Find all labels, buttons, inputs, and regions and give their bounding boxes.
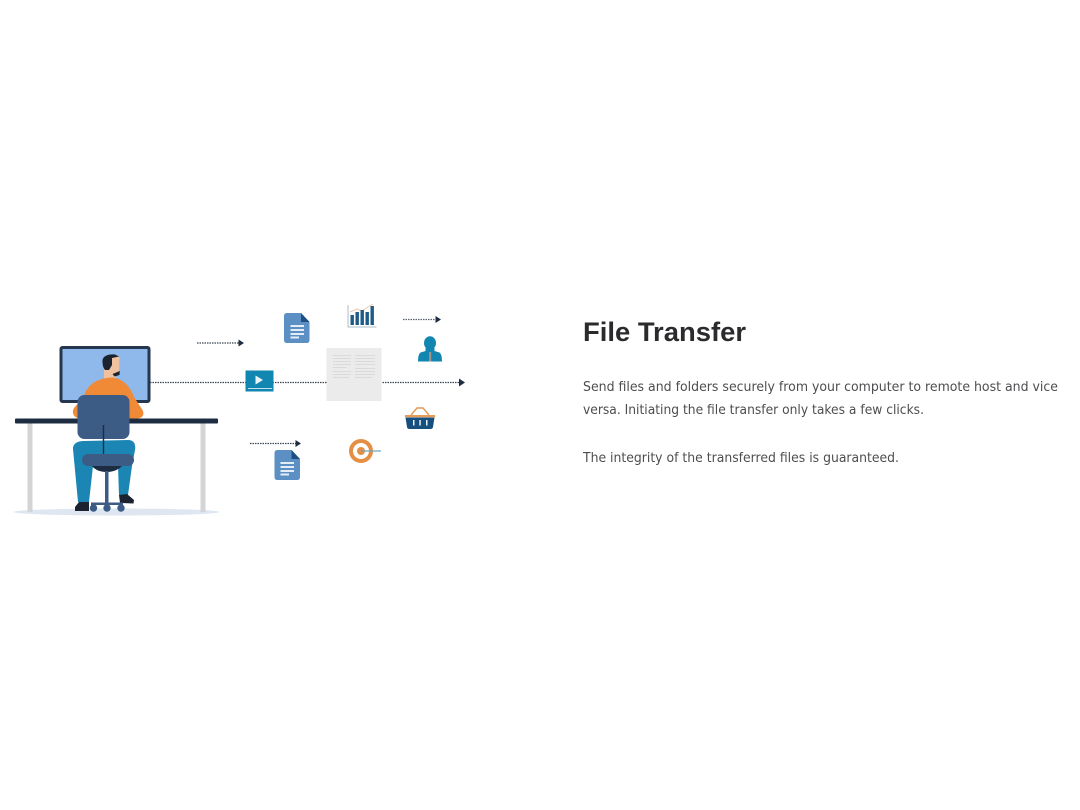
chair [78, 395, 134, 512]
text block: description: versa. Initiating the file transfer only takes a few clicks. [583, 402, 924, 418]
person: orange shirt [73, 378, 143, 418]
text block: description: Send files and folders securely from your computer to remote host and vice [583, 379, 1058, 395]
icon: bar chart [348, 304, 376, 327]
person: shoes [75, 494, 134, 511]
icon: document bottom [274, 450, 300, 480]
text block: description [583, 379, 1058, 418]
icon: document top [284, 313, 310, 343]
icon: shopping basket [405, 408, 435, 429]
illustration: file transfer scene [14, 304, 465, 516]
icon: target [351, 441, 381, 461]
icon: computer monitor [61, 348, 149, 402]
arrow: main dotted line from monitor [150, 378, 465, 386]
title: File Transfer [583, 317, 746, 347]
icon: businessperson [418, 336, 442, 362]
icon: video player [246, 370, 274, 392]
person at desk on chair [73, 354, 143, 512]
desk [15, 418, 218, 512]
person: blue trousers [73, 440, 135, 502]
icon: text page [326, 348, 382, 401]
floor shadow [14, 508, 220, 516]
arrow: upper right [403, 316, 441, 323]
arrow: lower left [250, 440, 301, 447]
arrow: upper left [197, 340, 244, 346]
text block: integrity note: The integrity of the transferred files is guaranteed. [582, 450, 899, 466]
person: head [102, 354, 120, 379]
